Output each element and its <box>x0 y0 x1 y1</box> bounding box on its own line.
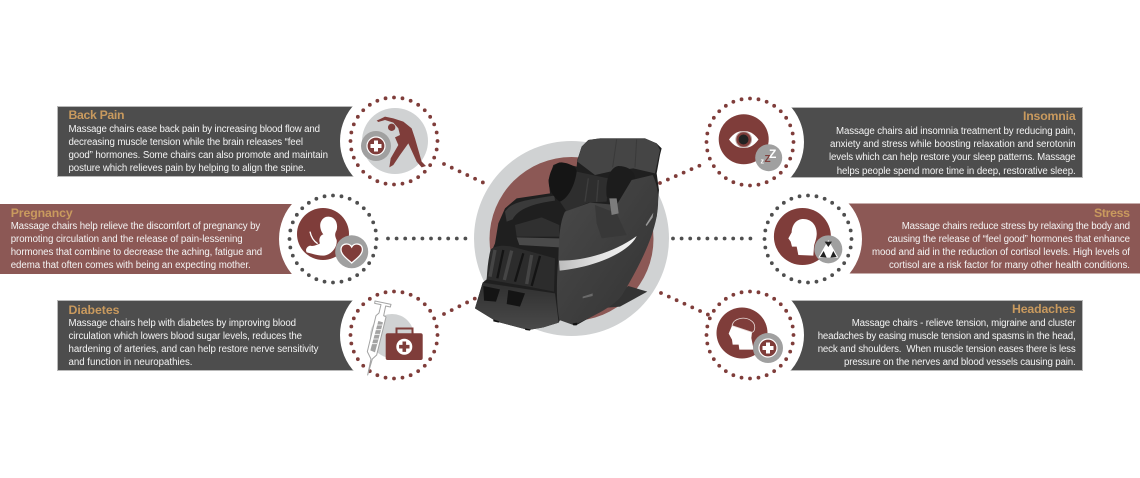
connector: stress to chair <box>673 237 755 240</box>
badge: medical cross <box>361 131 391 161</box>
text: pregnancy description: Massage chairs help relieve the discomfort of pregnancy by <box>11 221 260 232</box>
icon: diabetes <box>340 281 448 389</box>
text: headaches description: Massage chairs - relieve tension, migraine and cluster <box>852 318 1076 329</box>
heading: insomnia: Insomnia <box>1023 109 1076 123</box>
figure: fetus <box>306 217 337 256</box>
badge: sleep: z <box>760 158 764 166</box>
text: back pain description: good” hormones. Some chairs can also promote and maintain <box>68 150 328 161</box>
silver band <box>559 236 637 271</box>
badge: sleep <box>755 144 782 171</box>
badge: medical cross <box>753 333 783 363</box>
text: diabetes description: circulation which lowers blood sugar levels, reduces the <box>68 331 302 342</box>
icon: insomnia <box>696 88 804 196</box>
text: pregnancy description: hormones that combine to decrease the aching, fatigue and <box>11 247 262 258</box>
text: pregnancy description: promoting circulation and the release of pain-lessening <box>11 234 243 245</box>
text: insomnia description: levels which can help restore your sleep patterns. Massage <box>829 152 1076 163</box>
chair base <box>598 286 647 308</box>
side pocket <box>595 205 627 238</box>
remote control <box>609 198 619 215</box>
text: stress description: causing the release of “feel good” hormones that enhance <box>888 234 1130 245</box>
text: headaches description: headaches by easing muscle tension and spasms in the head, <box>818 331 1076 342</box>
text: diabetes description <box>68 318 319 368</box>
icon: headaches <box>696 281 804 389</box>
connector: pregnancy to chair <box>388 237 470 240</box>
panel: diabetes <box>58 300 358 370</box>
central backdrop: grey and red circles <box>474 141 669 336</box>
connector: insomnia to chair <box>660 165 701 183</box>
panel: back pain <box>58 106 358 176</box>
panel: stress <box>845 204 1140 274</box>
text: stress description: mood and aid in the reduction of cortisol levels. High levels of <box>872 247 1130 258</box>
rear trim <box>646 213 653 226</box>
text: headaches description <box>818 318 1076 368</box>
head silhouette <box>788 219 817 256</box>
badge: cycle <box>814 235 842 263</box>
icon: syringe <box>367 301 391 375</box>
panel: insomnia <box>787 108 1082 178</box>
text: pregnancy description <box>11 221 262 271</box>
heading: diabetes: Diabetes <box>68 303 120 317</box>
badge: heart <box>335 235 368 268</box>
calf massager <box>487 246 555 292</box>
badge: sleep: Z <box>769 147 776 161</box>
text: stress description <box>872 221 1130 271</box>
text: insomnia description: anxiety and stress while boosting relaxation and serotonin <box>830 139 1076 150</box>
feet <box>493 319 577 331</box>
eye <box>729 131 758 148</box>
text: back pain description <box>68 124 328 174</box>
icon: stress <box>754 185 862 293</box>
connector: headaches to chair <box>661 293 711 316</box>
text: diabetes description: hardening of arteries, and can help restore nerve sensitivity <box>68 344 319 355</box>
connector: diabetes to chair <box>444 298 476 314</box>
text: insomnia description <box>829 126 1076 177</box>
connector: back pain to chair <box>444 164 484 183</box>
foot massager <box>475 283 559 330</box>
icon: first aid kit <box>386 328 423 360</box>
heading: headaches: Headaches <box>1012 302 1076 316</box>
backrest upper cushion <box>577 138 660 175</box>
chair silhouette <box>475 138 662 330</box>
icon: back pain <box>340 87 448 195</box>
text: back pain description: decreasing muscle tension while the brain releases “feel <box>68 137 303 148</box>
text: pregnancy description: edema that often comes with being an expecting mother. <box>11 260 251 271</box>
logo <box>583 293 593 298</box>
badge: sleep: Z <box>764 154 771 165</box>
figure: stretching person <box>377 117 426 167</box>
head with headache outline <box>729 318 755 350</box>
panel: headaches <box>787 300 1082 370</box>
main side shell <box>557 175 658 325</box>
far armrest highlight <box>505 196 555 222</box>
backrest lower cushion <box>560 172 608 212</box>
text: insomnia description: helps people spend more time in deep, restorative sleep. <box>837 166 1076 177</box>
seat <box>517 237 559 247</box>
text: diabetes description: and function in neuropathies. <box>68 357 192 368</box>
heading: stress: Stress <box>1094 206 1130 220</box>
massage chair illustration <box>475 138 662 331</box>
panel: pregnancy <box>0 204 295 274</box>
icon: pregnancy <box>279 185 387 293</box>
side headrests <box>549 162 577 202</box>
text: diabetes description: Massage chairs help with diabetes by improving blood <box>68 318 296 329</box>
text: stress description: cortisol are a risk factor for many other health conditions. <box>889 260 1130 271</box>
text: back pain description: posture which relieves pain by helping to align the spine. <box>68 163 306 174</box>
text: insomnia description: Massage chairs aid insomnia treatment by reducing pain, <box>836 126 1076 137</box>
text: headaches description: pressure on the nerves and blood vessels causing pain. <box>844 357 1076 368</box>
text: headaches description: neck and shoulders. When muscle tension eases there is less <box>818 344 1076 355</box>
heading: back pain: Back Pain <box>68 108 124 122</box>
text: stress description: Massage chairs reduce stress by relaxing the body and <box>902 221 1130 232</box>
heading: pregnancy: Pregnancy <box>11 206 73 220</box>
text: back pain description: Massage chairs ease back pain by increasing blood flow and <box>68 124 320 135</box>
